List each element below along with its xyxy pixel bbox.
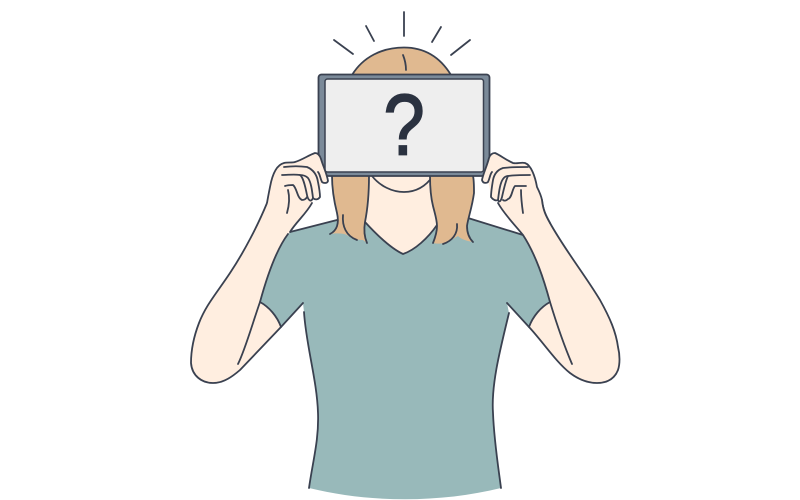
left hand <box>267 153 328 233</box>
icon: surprise rays above head <box>334 12 470 55</box>
left arm <box>191 185 312 383</box>
left hair lock <box>330 176 369 243</box>
t-shirt <box>260 210 550 499</box>
tablet <box>318 74 490 176</box>
question mark: ? <box>383 76 425 173</box>
neck and chest <box>360 172 440 254</box>
hair top of head <box>352 48 451 75</box>
right hand <box>482 153 550 235</box>
right arm <box>498 185 620 383</box>
tablet screen <box>325 79 484 172</box>
right hair lock <box>430 176 474 244</box>
